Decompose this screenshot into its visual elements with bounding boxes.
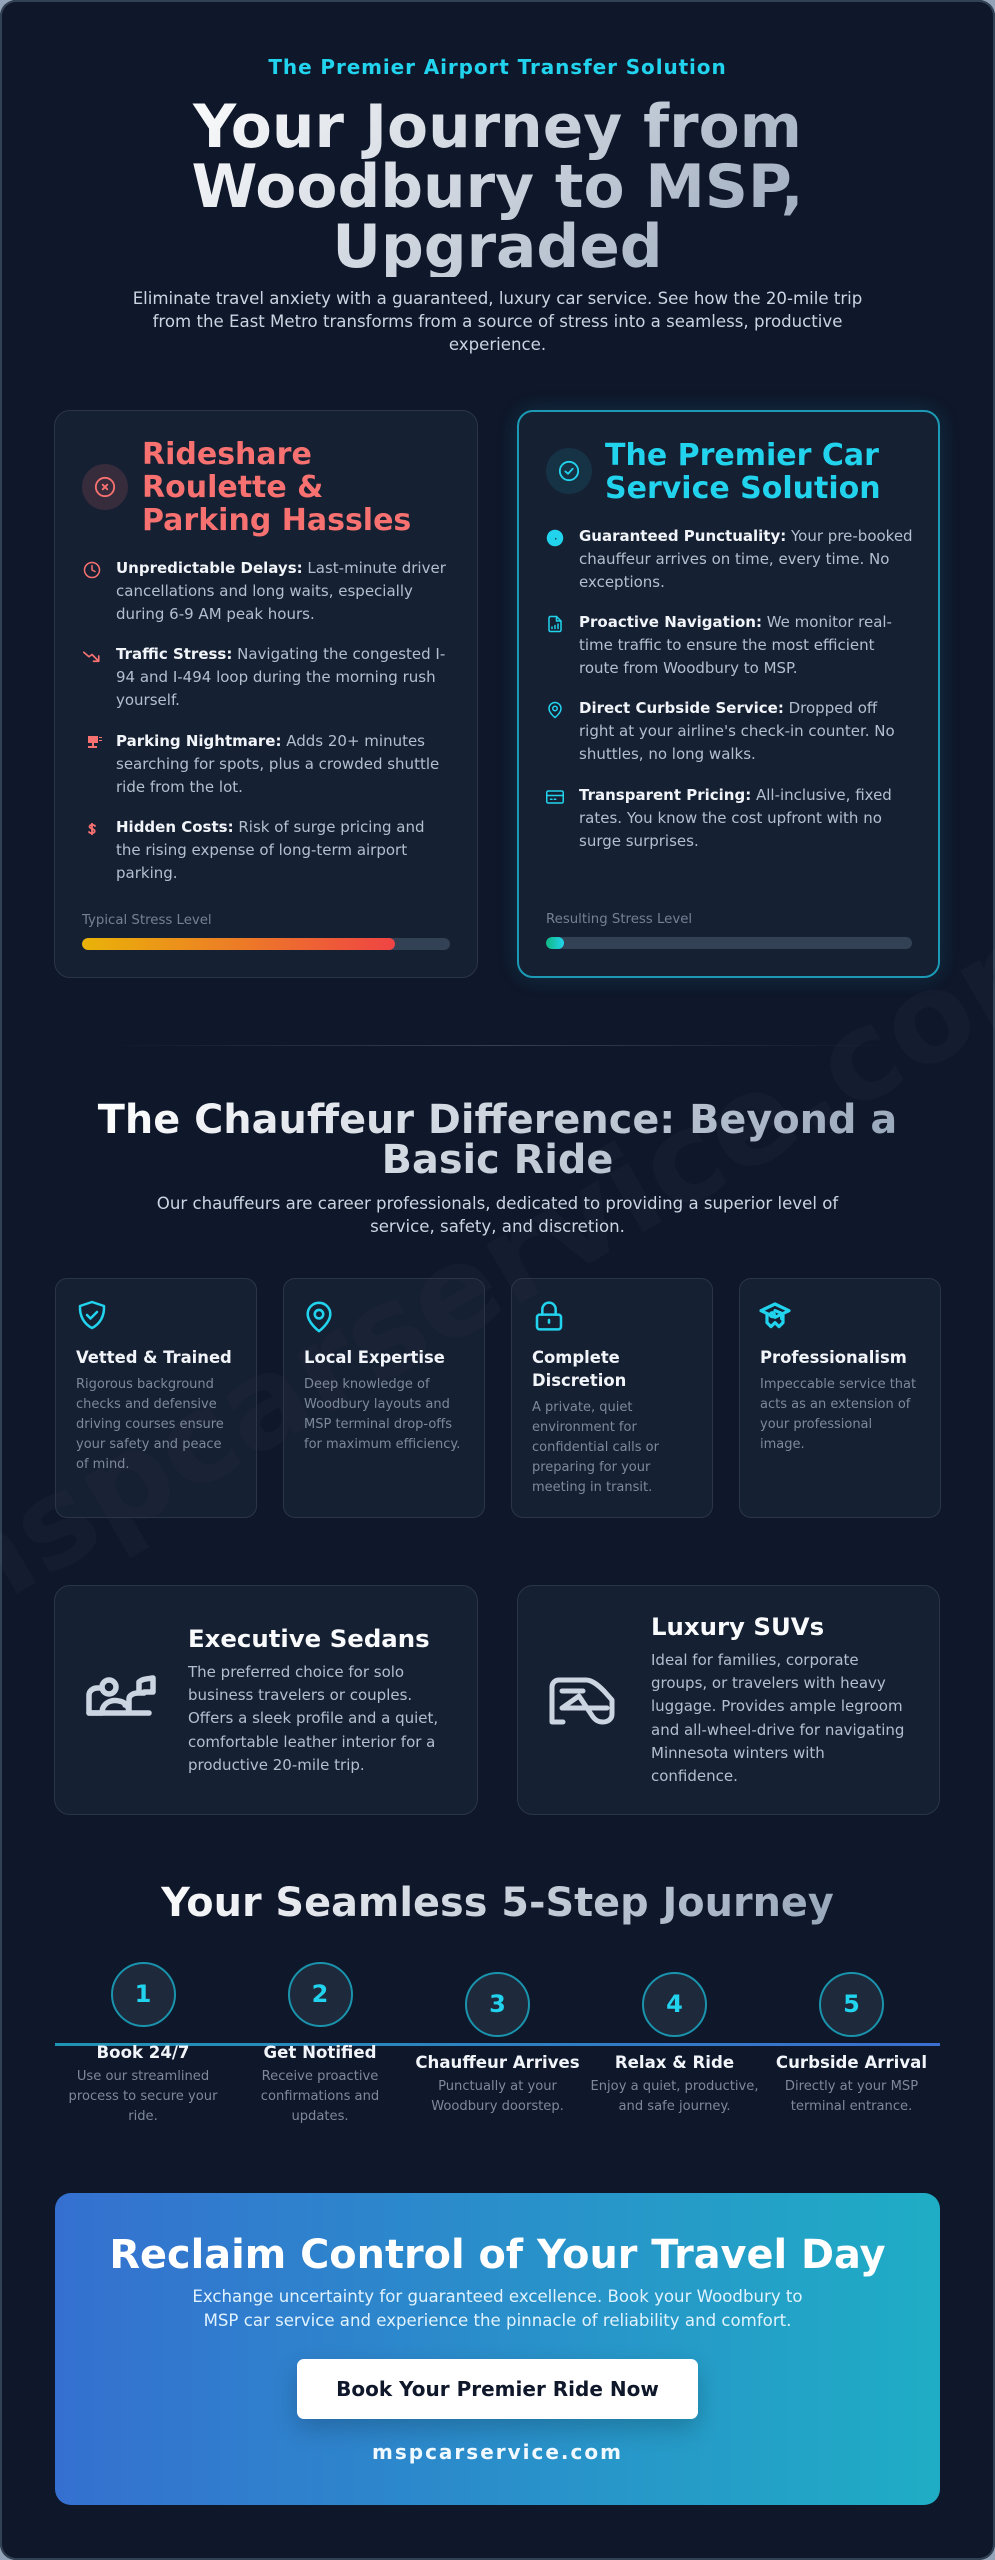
text: sedans: productive 20-mile trip.: [188, 1756, 365, 1774]
icon: lock: [536, 1301, 562, 1331]
item: punctuality: chauffeur arrives on time, every time. No: [579, 550, 889, 568]
text: suvs: Minnesota winters with: [651, 1744, 825, 1762]
card: discretion: [511, 1278, 713, 1518]
item: parking: [88, 732, 439, 796]
item: delays: cancellations and long waits, especially: [116, 582, 413, 600]
item: curbside: Direct Curbside Service: Dropped off: [579, 699, 877, 717]
text: suvs: Luxury SUVs: [651, 1612, 824, 1641]
step text: [69, 2068, 218, 2124]
heading: solution: Service Solution: [605, 471, 881, 506]
card: local: MSP terminal drop-offs: [304, 1416, 452, 1432]
step 3: [415, 1972, 580, 2114]
item: pricing: surge surprises.: [579, 832, 699, 850]
card: local: Local Expertise: [304, 1348, 445, 1367]
icon: graduation cap: [759, 1302, 791, 1328]
text: suvs: groups, or travelers with heavy: [651, 1674, 886, 1692]
step number: [642, 1972, 707, 2037]
card: vetted: Rigorous background: [76, 1376, 214, 1392]
panel: premier solution: [517, 410, 940, 978]
step number: 5: [843, 1990, 860, 2018]
item: traffic: Traffic Stress: Navigating the congested I-: [116, 645, 445, 663]
cta heading: Reclaim Control of Your Travel Day: [109, 2232, 886, 2278]
card: vetted: Vetted & Trained: [76, 1348, 232, 1367]
step text: ride.: [128, 2108, 158, 2124]
step 2: [261, 1962, 379, 2124]
item: costs: Hidden Costs: Risk of surge pricing and: [116, 818, 424, 836]
card: vetted: your safety and peace: [76, 1436, 222, 1452]
heading: rideshare: Parking Hassles: [142, 502, 411, 538]
text: sedans: comfortable leather interior for a: [188, 1733, 435, 1751]
text: suvs: [651, 1612, 904, 1785]
item: punctuality: [546, 527, 913, 591]
card: local: Woodbury layouts and: [304, 1396, 450, 1412]
step text: terminal entrance.: [791, 2098, 912, 2114]
step text: process to secure your: [69, 2088, 217, 2104]
title: Woodbury to MSP,: [191, 152, 804, 222]
step text: confirmations and: [261, 2088, 379, 2104]
item: parking: ride from the lot.: [116, 778, 243, 796]
section heading: chauffeur: [97, 1100, 898, 1180]
card: professionalism: [739, 1278, 941, 1518]
step title: Book 24/7: [97, 2043, 189, 2062]
text: suvs: luggage. Provides ample legroom: [651, 1697, 903, 1715]
item: curbside: shuttles, no long walks.: [579, 745, 756, 763]
stress meter: [82, 938, 450, 950]
hero subtitle: Eliminate travel anxiety with a guaranteed, luxury car service. See how the 20-mile trip: [133, 289, 862, 308]
step text: Woodbury doorstep.: [431, 2098, 564, 2114]
icon: shield: [78, 1300, 106, 1330]
item: navigation: Proactive Navigation: We monitor real-: [579, 613, 892, 631]
item: pricing: rates. You know the cost upfront with no: [579, 808, 882, 826]
card: professionalism: Impeccable service that: [760, 1376, 916, 1392]
step text: [785, 2078, 918, 2114]
card: vetted: of mind.: [76, 1456, 130, 1472]
text: suvs: Ideal for families, corporate: [651, 1651, 859, 1669]
card: vetted: [55, 1278, 257, 1518]
text: sedans: The preferred choice for solo: [188, 1663, 404, 1681]
card: discretion: preparing for your: [532, 1460, 650, 1475]
card: local: for maximum efficiency.: [304, 1436, 460, 1452]
card: discretion: confidential calls or: [532, 1440, 659, 1455]
card: discretion: environment for: [532, 1420, 637, 1435]
stress label: Typical Stress Level: [82, 913, 212, 928]
card: discretion: Complete: [532, 1348, 620, 1367]
step number: 4: [666, 1990, 683, 2018]
hero subtitle: experience.: [449, 335, 546, 354]
step text: [261, 2068, 379, 2124]
step text: [590, 2078, 759, 2114]
icon: pin: [306, 1302, 332, 1332]
text: sedans: Executive Sedans: [188, 1624, 430, 1653]
step number: [110, 1962, 176, 2027]
item: parking: searching for spots, plus a crowded shuttle: [116, 754, 439, 772]
step 1: [69, 1962, 218, 2124]
timeline line: [55, 2043, 940, 2046]
section heading: chauffeur: Basic Ride: [382, 1136, 613, 1182]
item: costs: parking.: [116, 864, 178, 882]
heading: solution: [605, 438, 881, 506]
icon: check circle: [546, 448, 592, 494]
step number: 1: [135, 1980, 151, 2008]
item: navigation: time traffic to ensure the most efficient: [579, 636, 875, 654]
text: sedans: business travelers or couples.: [188, 1686, 412, 1704]
step text: [431, 2078, 564, 2114]
icon: sedan: [86, 1675, 156, 1716]
item: costs: [88, 818, 424, 882]
step 5: [776, 1972, 927, 2114]
website: mspcarservice.com: [372, 2440, 623, 2464]
item: pricing: Transparent Pricing: All-inclusive, fixed: [579, 786, 892, 804]
card: vetted: driving courses ensure: [76, 1416, 224, 1432]
step text: and safe journey.: [619, 2098, 730, 2114]
step text: Punctually at your: [438, 2078, 557, 2094]
step number: 2: [312, 1980, 328, 2008]
card: vetted: checks and defensive: [76, 1396, 217, 1412]
item: traffic: 94 and I-494 loop during the morning rush: [116, 668, 436, 686]
section subtitle: chauffeur: service, safety, and discretion.: [370, 1217, 625, 1236]
text: suvs: confidence.: [651, 1767, 738, 1785]
item: curbside: right at your airline's check-in counter. No: [579, 722, 895, 740]
item: pricing: [546, 786, 892, 850]
step number: [288, 1962, 352, 2027]
card: local: Deep knowledge of: [304, 1376, 430, 1392]
step number: [465, 1972, 530, 2037]
section heading: chauffeur: The Chauffeur Difference: Beyond a: [98, 1096, 897, 1142]
card: professionalism: Professionalism: [760, 1348, 907, 1367]
step title: Relax & Ride: [615, 2053, 734, 2072]
step title: Curbside Arrival: [776, 2053, 927, 2072]
title: [150, 96, 845, 276]
step text: Use our streamlined: [77, 2068, 209, 2084]
step number: [819, 1972, 884, 2037]
item: traffic: yourself.: [116, 691, 180, 709]
step text: Receive proactive: [262, 2068, 378, 2084]
step text: updates.: [291, 2108, 349, 2124]
card: professionalism: acts as an extension of: [760, 1396, 910, 1412]
cta text: Exchange uncertainty for guaranteed excellence. Book your Woodbury to: [192, 2287, 803, 2306]
step title: Chauffeur Arrives: [415, 2053, 580, 2072]
text: sedans: [188, 1624, 438, 1774]
step title: Get Notified: [264, 2043, 376, 2062]
item: delays: Unpredictable Delays: Last-minute driver: [116, 559, 446, 577]
hero subtitle: [133, 289, 862, 354]
card: discretion: A private, quiet: [532, 1400, 632, 1415]
title: Upgraded: [332, 212, 663, 282]
item: navigation: [548, 613, 892, 677]
cta text: MSP car service and experience the pinnacle of reliability and comfort.: [204, 2311, 791, 2330]
cta button: [297, 2359, 698, 2419]
section subtitle: chauffeur: [157, 1194, 839, 1236]
heading: solution: The Premier Car: [605, 438, 879, 473]
card: discretion: meeting in transit.: [532, 1480, 652, 1495]
item: costs: the rising expense of long-term airport: [116, 840, 407, 858]
card: sedans: [54, 1585, 478, 1815]
step 4: [590, 1972, 759, 2114]
item: curbside: [548, 699, 895, 763]
card: local: [283, 1278, 485, 1518]
hero subtitle: from the East Metro transforms from a source of stress into a seamless, productive: [153, 312, 842, 331]
item: parking: Parking Nightmare: Adds 20+ minutes: [116, 732, 425, 750]
step number: 3: [489, 1990, 506, 2018]
heading: rideshare: Rideshare: [142, 436, 312, 472]
panel: rideshare problems: [54, 410, 478, 978]
item: delays: [84, 559, 446, 623]
stress label: Resulting Stress Level: [546, 912, 692, 927]
heading: rideshare: [142, 436, 411, 538]
item: punctuality: exceptions.: [579, 573, 665, 591]
card: professionalism: your professional: [760, 1416, 872, 1432]
card: professionalism: image.: [760, 1436, 805, 1452]
section subtitle: chauffeur: Our chauffeurs are career professionals, dedicated to providing a superior level of: [157, 1194, 838, 1213]
item: punctuality: Guaranteed Punctuality: Your pre-booked: [579, 527, 913, 545]
cta text: [192, 2287, 803, 2330]
section heading: steps: Your Seamless 5-Step Journey: [161, 1880, 834, 1926]
cta button: Book Your Premier Ride Now: [336, 2377, 659, 2401]
item: navigation: route from Woodbury to MSP.: [579, 659, 798, 677]
item: traffic: [83, 645, 445, 709]
card: suvs: [517, 1585, 940, 1815]
text: suvs: and all-wheel-drive for navigating: [651, 1721, 904, 1739]
step text: Directly at your MSP: [785, 2078, 918, 2094]
stress meter: [546, 937, 912, 949]
icon: suv: [550, 1678, 614, 1724]
card: discretion: Discretion: [532, 1371, 626, 1390]
step text: Enjoy a quiet, productive,: [590, 2078, 759, 2094]
title: Your Journey from: [193, 92, 802, 162]
heading: rideshare: Roulette &: [142, 470, 323, 504]
eyebrow: The Premier Airport Transfer Solution: [268, 55, 727, 79]
text: sedans: Offers a sleek profile and a quiet,: [188, 1709, 438, 1727]
item: delays: during 6-9 AM peak hours.: [116, 605, 315, 623]
icon: x circle: [82, 464, 128, 510]
cta panel: [55, 2193, 940, 2505]
